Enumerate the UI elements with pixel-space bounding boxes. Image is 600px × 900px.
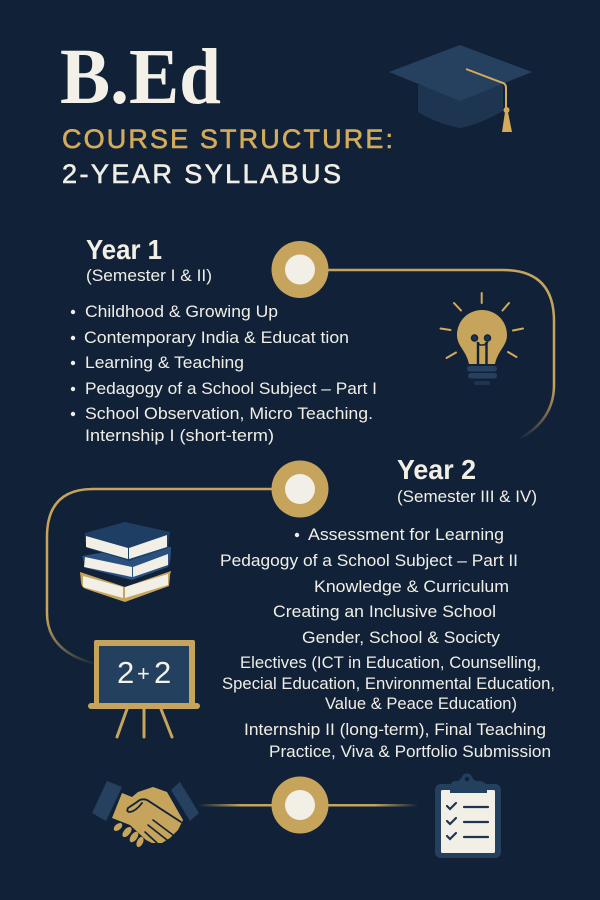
year 2 course list: Assessment for Learning (308, 525, 504, 544)
year 1 course list: Internship I (short-term) (85, 426, 274, 445)
icon: graduation cap (389, 45, 532, 132)
year 1 course list (71, 302, 377, 445)
panel: year 2 (220, 454, 555, 761)
subtitle: course structure: COURSE STRUCTURE: (62, 124, 393, 154)
icon: light bulb (440, 293, 523, 385)
year 2 course list: Electives (ICT in Education, Counselling, (240, 653, 541, 672)
main title: B.Ed (60, 34, 221, 121)
timeline connector: year 2 to bottom (47, 489, 300, 664)
icon: stack of books (80, 522, 171, 602)
chalkboard equation: + (137, 661, 150, 686)
icon: clipboard checklist (435, 774, 501, 858)
icon: handshake (92, 781, 199, 848)
year 1 course list: Contemporary India & Educat tion (84, 328, 349, 347)
year 2 semester label: (Semester III & IV) (397, 488, 537, 506)
timeline node: year 2 (272, 460, 328, 518)
year 1 heading: Year 1 (86, 234, 162, 265)
panel: year 1 (71, 234, 377, 445)
year 2 course list: Knowledge & Curriculum (314, 577, 509, 596)
year 2 course list: Gender, School & Socicty (302, 628, 501, 647)
year 2 course list: Special Education, Environmental Education, (222, 674, 555, 693)
year 2 course list (220, 525, 555, 761)
year 2 heading: Year 2 (397, 454, 476, 485)
year 2 course list: Value & Peace Education) (325, 694, 517, 713)
chalkboard equation: 2 (117, 655, 134, 690)
chalkboard equation: 2 (154, 655, 171, 690)
year 1 course list: Childhood & Growing Up (85, 302, 278, 321)
year 2 course list: Internship II (long-term), Final Teaching (244, 720, 546, 739)
timeline connector: year 1 to year 2 (300, 270, 554, 439)
title block (60, 34, 393, 189)
year 2 course list: Practice, Viva & Portfolio Submission (269, 742, 551, 761)
year 1 semester label: (Semester I & II) (86, 267, 212, 285)
timeline node: year 1 (272, 241, 328, 298)
year 1 course list: Learning & Teaching (85, 353, 244, 372)
icon: chalkboard (88, 640, 200, 737)
timeline connector: bottom line (198, 804, 418, 806)
subtitle: syllabus: 2-YEAR SYLLABUS (62, 159, 341, 189)
year 1 course list: Pedagogy of a School Subject – Part I (85, 379, 377, 398)
timeline node: end (272, 776, 328, 834)
year 1 course list: School Observation, Micro Teaching. (85, 404, 373, 423)
year 2 course list: Pedagogy of a School Subject – Part II (220, 551, 518, 570)
year 2 course list: Creating an Inclusive School (273, 602, 496, 621)
